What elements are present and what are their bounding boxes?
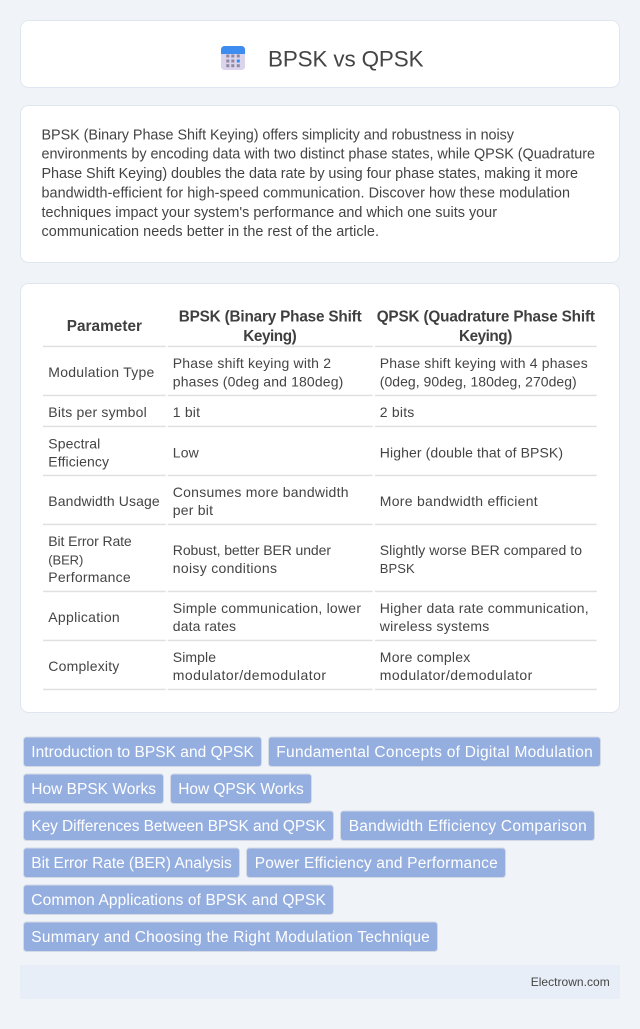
row: application [48, 600, 589, 634]
row: complexity: Complexity [48, 658, 119, 674]
row: spectral efficiency: Efficiency [48, 454, 109, 470]
row: bits per symbol [48, 404, 414, 420]
topic tags [24, 737, 600, 952]
tag: how QPSK works: How QPSK Works [178, 781, 304, 798]
footer source text: Electrown.com [531, 975, 610, 989]
table header row: Parameter [67, 318, 142, 335]
tag: key differences [24, 811, 334, 840]
footer [20, 965, 620, 999]
row: bit error rate performance: (BER) [48, 552, 83, 567]
intro text: Phase Shift Keying) doubles the data rate by using four phase states, making it more [42, 166, 578, 182]
tag: how QPSK works [170, 774, 312, 804]
row: bits per symbol: 2 bits [380, 404, 414, 420]
table row rules [43, 346, 597, 690]
table header row: Keying) [459, 328, 512, 345]
row: modulation type: phases (0deg and 180deg) [173, 374, 343, 390]
row: bandwidth usage: Consumes more bandwidth [173, 484, 348, 500]
tag: how BPSK works [24, 774, 164, 804]
intro text [42, 127, 595, 240]
tag: key differences: Key Differences Between BPSK and QPSK [31, 818, 326, 835]
row: spectral efficiency: Low [173, 444, 200, 460]
tag: introduction [24, 737, 262, 766]
tag: bit error rate: Bit Error Rate (BER) Analysis [31, 855, 232, 872]
panel: comparison table [20, 284, 620, 712]
tag: bandwidth efficiency: Bandwidth Efficiency Comparison [349, 818, 587, 835]
row: bit error rate performance: Slightly worse BER compared to [380, 542, 582, 558]
row: application: Application [48, 609, 120, 625]
row: bit error rate performance: noisy conditions [173, 560, 277, 576]
tag: bandwidth efficiency [340, 811, 594, 840]
row: modulation type: Phase shift keying with 4 phases [380, 355, 588, 371]
row: spectral efficiency: Spectral [48, 436, 100, 452]
intro text: environments by encoding data with two distinct phase states, while QPSK (Quadrature [42, 147, 595, 163]
row: bit error rate performance: Bit Error Rate [48, 533, 132, 549]
row: spectral efficiency [48, 436, 563, 470]
row: bits per symbol: Bits per symbol [48, 404, 147, 420]
intro text: BPSK (Binary Phase Shift Keying) offers simplicity and robustness in noisy [42, 127, 515, 143]
intro text: techniques impact your system's performance and which one suits your [42, 205, 497, 221]
row: spectral efficiency: Higher (double that of BPSK) [380, 444, 563, 460]
row: modulation type: Modulation Type [48, 364, 155, 380]
row: complexity: modulator/demodulator [173, 667, 326, 683]
row: modulation type: Phase shift keying with 2 [173, 355, 331, 371]
table header row: QPSK (Quadrature Phase Shift [377, 309, 595, 326]
row: bits per symbol: 1 bit [173, 404, 200, 420]
row: application: data rates [173, 618, 236, 634]
tag: power efficiency [246, 848, 506, 878]
row: application: Higher data rate communication, [380, 600, 589, 616]
row: complexity: Simple [173, 649, 216, 665]
row: bandwidth usage: More bandwidth efficient [380, 493, 538, 509]
tag: fundamental concepts [268, 737, 600, 766]
row: bandwidth usage: per bit [173, 502, 213, 518]
tag: introduction: Introduction to BPSK and QPSK [31, 744, 254, 761]
intro text: communication needs better in the rest of the article. [42, 224, 379, 240]
row: modulation type [48, 355, 588, 390]
tag: how BPSK works: How BPSK Works [31, 781, 156, 798]
panel: intro paragraph [20, 106, 620, 262]
table header row: Keying) [243, 328, 297, 345]
tag: fundamental concepts: Fundamental Concepts of Digital Modulation [276, 744, 593, 761]
row: bandwidth usage: Bandwidth Usage [48, 493, 160, 509]
row: bandwidth usage [48, 484, 538, 518]
row: modulation type: (0deg, 90deg, 180deg, 270deg) [380, 374, 577, 390]
icon: calendar grid [221, 46, 245, 70]
table header row: BPSK (Binary Phase Shift [179, 309, 362, 326]
title: BPSK vs QPSK [268, 47, 424, 72]
row: bit error rate performance: Performance [48, 569, 131, 585]
row: complexity [48, 649, 533, 683]
tag: bit error rate [24, 848, 240, 878]
row: complexity: More complex [380, 649, 470, 665]
intro text: bandwidth-efficient for high-speed communication. Discover how these modulation [42, 185, 570, 201]
row: bit error rate performance [48, 533, 582, 585]
row: application: Simple communication, lower [173, 600, 361, 616]
row: complexity: modulator/demodulator [380, 667, 533, 683]
tag: summary: Summary and Choosing the Right Modulation Technique [31, 929, 430, 946]
tag: common applications: Common Applications of BPSK and QPSK [31, 892, 326, 909]
row: bit error rate performance: BPSK [380, 561, 415, 576]
header panel [20, 20, 620, 88]
tag: summary [24, 922, 438, 952]
table header row [67, 309, 595, 345]
row: application: wireless systems [379, 618, 489, 634]
tag: power efficiency: Power Efficiency and Performance [255, 855, 498, 872]
tag: common applications [24, 885, 334, 914]
row: bit error rate performance: Robust, better BER under [173, 542, 331, 558]
